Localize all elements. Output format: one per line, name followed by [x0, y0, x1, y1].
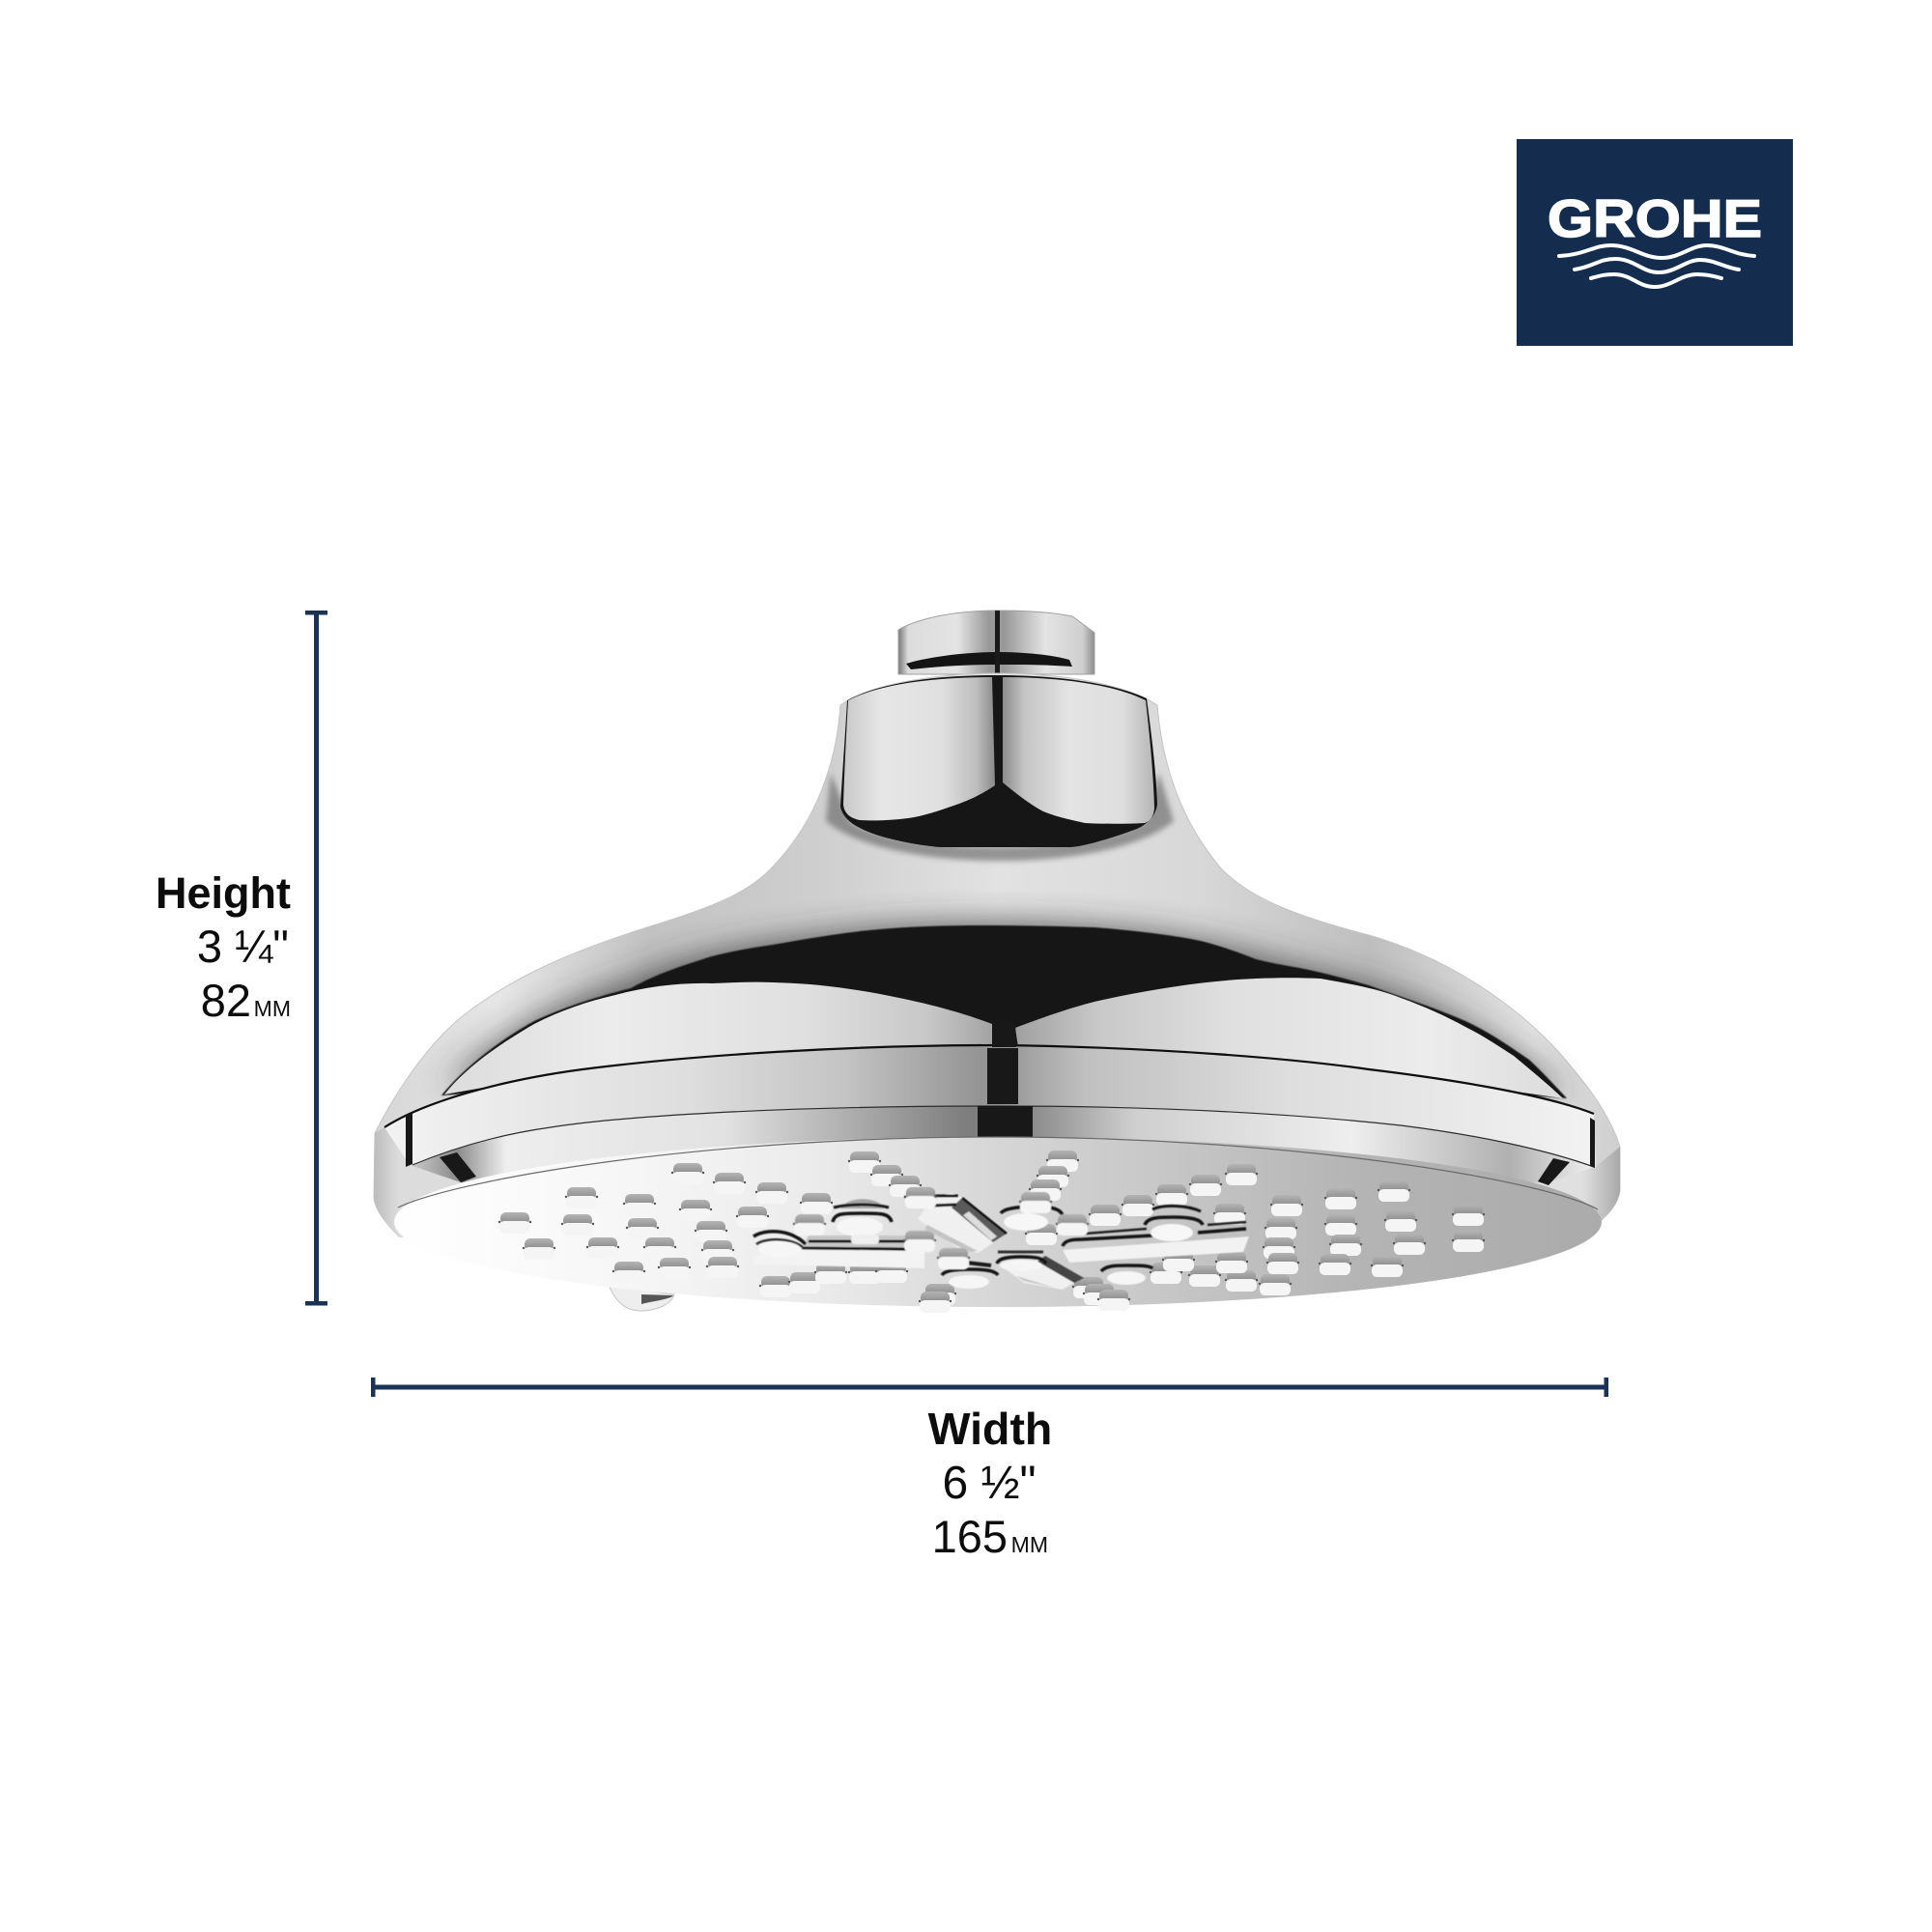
- width dimension line: [371, 1378, 1608, 1397]
- bell soft reflection: [444, 924, 1565, 1096]
- dome left panel: [444, 982, 992, 1094]
- collar left reflection: [843, 677, 995, 820]
- face plate top edge: [398, 1137, 1598, 1209]
- upper diagonal arm: [904, 1187, 1007, 1253]
- width label: MM: [1011, 1532, 1048, 1557]
- logo: GROHE: [1517, 139, 1793, 346]
- dome dark reflection band: [441, 925, 1567, 1098]
- height label: MM: [254, 996, 291, 1021]
- height dimension line: [305, 611, 327, 1306]
- raised spray cross: [753, 1187, 1249, 1290]
- collar soft shadow: [826, 773, 1174, 861]
- width label: 165: [932, 1511, 1008, 1562]
- rim seam lines: [384, 1045, 1594, 1167]
- center dark reflections: [406, 1019, 1595, 1185]
- collar right reflection: [1003, 677, 1154, 824]
- right arm: [1001, 1192, 1249, 1263]
- dome right panel: [1015, 978, 1563, 1098]
- rim band upper: [384, 1045, 1596, 1174]
- lower diagonal arm: [937, 1248, 1152, 1290]
- pull tab lever: [609, 1285, 674, 1311]
- spray face plate: [394, 1137, 1602, 1307]
- threaded nut: [898, 611, 1094, 676]
- width label: Width: [928, 1404, 1052, 1454]
- height label: Height: [156, 868, 291, 918]
- width label: [928, 1404, 1052, 1562]
- height label: 3 ¼": [197, 921, 289, 972]
- logo waves: [1559, 245, 1754, 287]
- height label: [156, 868, 291, 1026]
- spray nozzles: [498, 1151, 1485, 1313]
- logo wordmark: GROHE: [1548, 188, 1762, 248]
- height label: 82: [201, 975, 251, 1026]
- rim band lower: [374, 1106, 1620, 1236]
- left arm: [753, 1199, 936, 1268]
- width label: 6 ½": [942, 1458, 1037, 1509]
- rim band lower sheen: [412, 1106, 1594, 1183]
- product: shower head: [374, 611, 1620, 1313]
- collar shadow base: [840, 675, 1157, 847]
- bell body: [374, 673, 1620, 1236]
